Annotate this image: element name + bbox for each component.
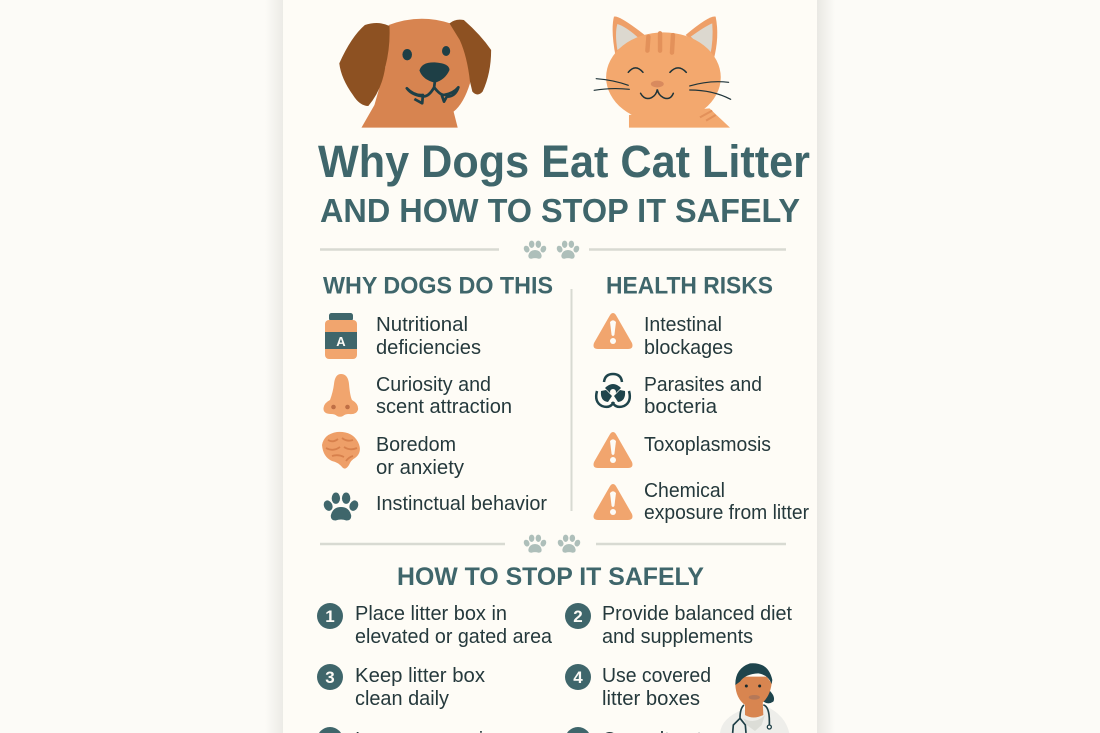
center divider [570, 289, 572, 511]
text: curiosity: scent attraction [376, 396, 512, 418]
text: boredom: or anxiety [376, 457, 464, 479]
card shadow [265, 0, 835, 733]
illustration: veterinarian [720, 663, 789, 733]
text: nutritional deficiencies: Nutritional [376, 314, 468, 336]
heading: why dogs do this: WHY DOGS DO THIS [323, 272, 553, 300]
title: Why Dogs Eat Cat Litter [318, 136, 810, 187]
text: intestinal blockages: Intestinal [644, 314, 722, 336]
text: parasites: Parasites and [644, 374, 762, 396]
panel: health risks [594, 272, 809, 524]
text: chemical exposure: Chemical [644, 480, 725, 502]
step 1 text: Place litter box in [355, 603, 507, 625]
step 2 number: 2 [573, 607, 583, 626]
step 3 text: Keep litter box [355, 665, 485, 687]
text: intestinal blockages: blockages [644, 337, 733, 359]
step 3 number [317, 664, 343, 690]
step 3 number: 3 [325, 668, 335, 687]
text: parasites: bocteria [644, 396, 718, 418]
panel: infographic card [283, 0, 817, 733]
icon: brain [322, 432, 360, 469]
divider with paws [320, 241, 786, 259]
step 1 number: 1 [325, 607, 335, 626]
step 4 number [565, 664, 591, 690]
step 5 number [317, 727, 343, 733]
text: nutritional deficiencies: deficiencies [376, 337, 481, 359]
step 4 text: litter boxes [602, 688, 700, 710]
icon: nose nostrils [331, 405, 350, 409]
heading: health risks: HEALTH RISKS [606, 272, 773, 300]
text: toxoplasmosis: Toxoplasmosis [644, 434, 771, 456]
icon: biohazard [596, 374, 630, 407]
heading: how to stop: HOW TO STOP IT SAFELY [397, 563, 704, 591]
step 1 number [317, 603, 343, 629]
icon: warning [594, 313, 632, 349]
step 1 text: elevated or gated area [355, 626, 553, 648]
step 2 number [565, 603, 591, 629]
panel: how to stop it safely [317, 563, 792, 733]
icon: vitamin bottle: A [336, 334, 346, 349]
panel: why dogs do this [322, 272, 553, 520]
step 4 number: 4 [573, 668, 583, 687]
text: boredom: Boredom [376, 434, 456, 456]
subtitle: AND HOW TO STOP IT SAFELY [320, 193, 800, 230]
step 3 text: clean daily [355, 688, 449, 710]
icon: paw [322, 493, 360, 520]
step 2 text: Provide balanced diet [602, 603, 792, 625]
icon: warning [594, 484, 632, 520]
text: chemical exposure: exposure from litter [644, 502, 809, 524]
text: instinctual behavior: Instinctual behavior [376, 493, 547, 515]
illustration: dog [339, 19, 491, 128]
icon: nose [323, 374, 358, 417]
divider with paws [320, 535, 786, 553]
step 4 text: Use covered [602, 665, 711, 687]
illustration: cat [594, 17, 731, 128]
icon: warning [594, 432, 632, 468]
step 2 text: and supplements [602, 626, 753, 648]
icon: vitamin bottle [325, 313, 357, 359]
step 6 number [565, 727, 591, 733]
text: curiosity: Curiosity and [376, 374, 491, 396]
